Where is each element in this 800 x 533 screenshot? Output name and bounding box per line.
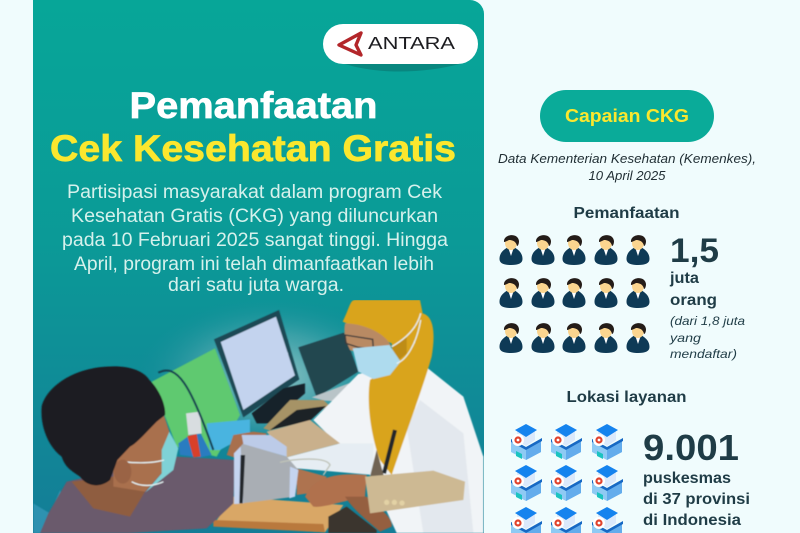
patient hair xyxy=(41,366,165,485)
nurse face xyxy=(344,323,392,355)
stat: 9.001 puskesmas: di 37 provinsi xyxy=(643,491,750,508)
source note: Data Kementerian Kesehatan (Kemenkes), xyxy=(498,152,756,166)
blood pressure cuff xyxy=(234,435,330,504)
title: Pemanfaatan xyxy=(130,85,378,126)
intro paragraph xyxy=(62,182,448,296)
stat: 1,5 juta orang: (dari 1,8 juta xyxy=(670,314,745,328)
lanyard xyxy=(384,430,395,473)
title xyxy=(50,85,456,169)
stat: 1,5 juta orang: mendaftar) xyxy=(670,347,737,361)
intro paragraph: Partisipasi masyarakat dalam program Cek xyxy=(67,182,443,203)
badge: Capaian CKG xyxy=(540,90,714,142)
logo: ANTARA pill: ANTARA xyxy=(368,33,455,53)
nurse left arm xyxy=(267,420,340,457)
desk items xyxy=(158,371,330,457)
heading: Lokasi layanan: Lokasi layanan xyxy=(566,389,686,406)
source note: 10 April 2025 xyxy=(588,169,666,183)
green wall xyxy=(152,348,240,457)
stat: 1,5 juta orang: juta xyxy=(669,270,699,287)
logo: ANTARA pill xyxy=(323,24,478,72)
intro paragraph: pada 10 Februari 2025 sangat tinggi. Hingga xyxy=(62,230,448,251)
patient ear xyxy=(114,460,131,484)
stat: 1,5 juta orang: 1,5 xyxy=(670,232,719,270)
photo background glow xyxy=(160,311,361,435)
nurse hand and right arm xyxy=(305,471,465,533)
nurse hijab xyxy=(343,300,434,475)
patient neck xyxy=(72,477,145,517)
nurse coat xyxy=(313,363,483,533)
stat: 1,5 juta orang: orang xyxy=(670,292,717,309)
badge: Capaian CKG: Capaian CKG xyxy=(565,106,689,126)
stat: 9.001 puskesmas: di Indonesia xyxy=(643,512,741,529)
stat: 9.001 puskesmas xyxy=(643,427,750,529)
table xyxy=(213,497,343,532)
nurse mask xyxy=(353,345,401,379)
heading: Pemanfaatan: Pemanfaatan xyxy=(574,205,680,222)
intro paragraph: April, program ini telah dimanfaatkan lebih xyxy=(74,254,434,275)
stat: 9.001 puskesmas: 9.001 xyxy=(643,427,739,468)
title: Cek Kesehatan Gratis xyxy=(50,128,456,169)
patient mask xyxy=(145,432,178,493)
stat: 9.001 puskesmas: puskesmas xyxy=(643,470,731,487)
patient face xyxy=(113,413,173,492)
patient shirt xyxy=(40,457,235,533)
source note xyxy=(498,152,756,183)
patient arm xyxy=(297,468,327,495)
stat: 1,5 juta orang xyxy=(669,232,745,361)
intro paragraph: Kesehatan Gratis (CKG) yang diluncurkan xyxy=(71,206,438,227)
panel: teal hero xyxy=(33,0,484,533)
stat: 1,5 juta orang: yang xyxy=(669,331,701,345)
icons: hospital grid xyxy=(511,424,623,533)
laptop xyxy=(298,333,358,402)
photo: health worker checking a patient's blood pressure xyxy=(33,297,483,533)
icons: people grid xyxy=(500,235,650,353)
intro paragraph: dari satu juta warga. xyxy=(168,275,344,296)
desktop monitor xyxy=(214,310,305,423)
